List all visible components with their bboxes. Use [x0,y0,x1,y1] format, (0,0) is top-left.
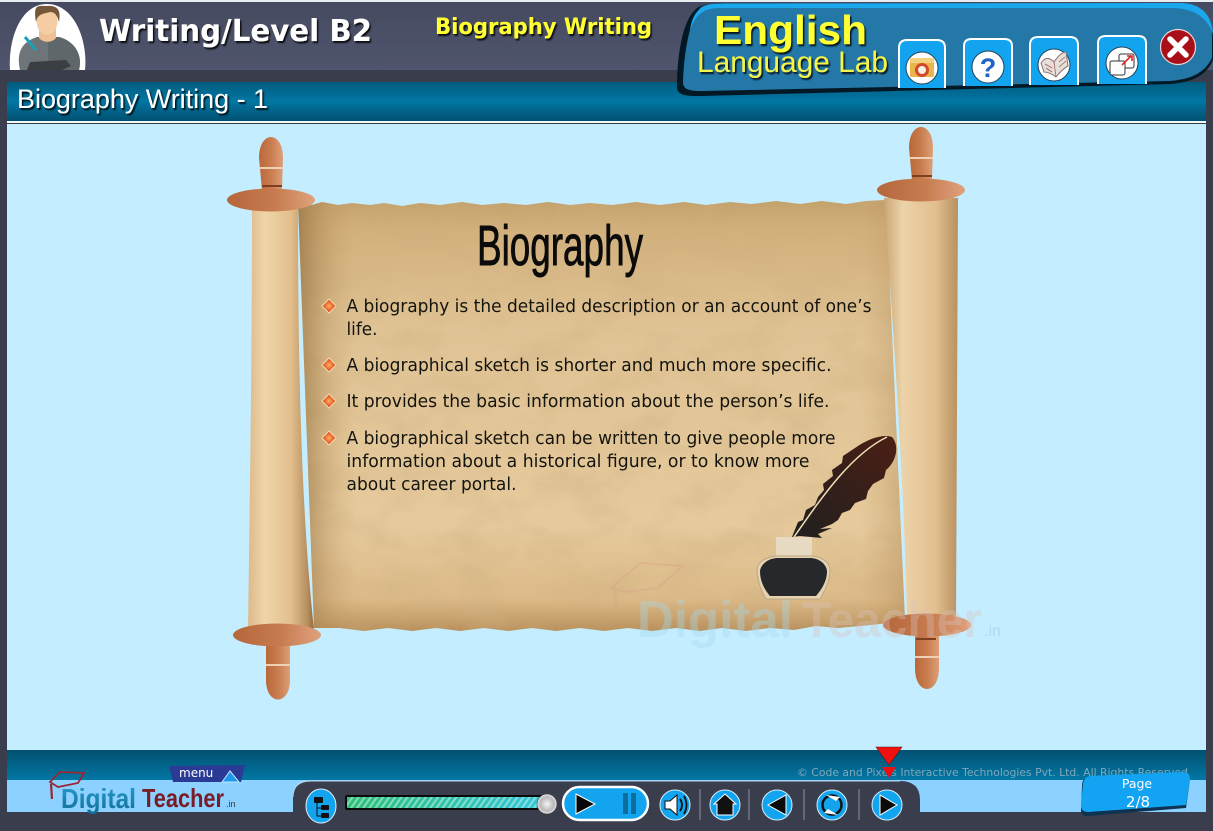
logo: Digital Teacher: .in [226,799,236,809]
control bar [293,781,920,823]
watermark: Digital Teacher: Teacher [802,592,982,648]
tab: help [964,39,1012,86]
red page marker [876,747,902,778]
heading: Biography: Biography [477,214,643,278]
button: previous [762,790,792,820]
tab: folder clock [899,40,945,88]
menu tab: menu [179,766,213,780]
section heading: Biography Writing - 1 [17,84,268,114]
top knob [227,137,315,212]
bullet 4 [322,429,836,495]
topic title: Biography Writing [435,15,652,40]
header title: Writing/Level B2 [99,14,372,49]
main content area [7,124,1206,750]
watermark: Digital Teacher [611,563,1001,649]
tab: book [1030,37,1078,85]
page indicator: 2/8 [1126,793,1150,811]
play pause pill [563,787,648,820]
bullet 1: A biography is the detailed description or an account of one’s [346,297,872,317]
bottom band [7,750,1206,812]
avatar: student writing [10,4,85,70]
icon: quill and inkwell [757,436,896,599]
subtitle band [7,82,1206,123]
panel: English Language Lab toolbar [677,3,1213,96]
icon: close button [1160,30,1196,64]
top knob [877,127,965,202]
bottom knob [883,614,971,689]
bullet list [322,297,872,495]
bullet 2: A biographical sketch is shorter and much more specific. [346,356,832,376]
left roller [227,137,321,700]
button: replay [817,790,847,820]
Language Lab heading: Language Lab [697,46,888,79]
bullet 4: information about a historical figure, or to know more [346,452,810,472]
logo: Digital Teacher: Teacher [142,783,224,813]
page indicator [1081,772,1190,816]
bullet 1 [322,297,872,340]
button: volume [660,790,690,820]
right roller [877,127,971,689]
bullet 4: A biographical sketch can be written to give people more [346,429,836,449]
watermark: Digital Teacher: .in [984,623,1001,640]
button: tree menu [306,789,336,823]
logo: Digital Teacher [50,772,236,814]
button: next [872,790,902,820]
watermark: Digital Teacher: Digital [637,591,793,649]
menu tab [169,765,245,782]
parchment sheet [290,198,915,634]
tab: window resize [1098,36,1146,84]
English heading: English [714,7,867,53]
bullet 1: life. [346,320,378,340]
bottom knob [233,624,321,700]
progress bar [345,794,557,814]
tab: help: ? [980,53,996,83]
logo: Digital Teacher: Digital [61,783,136,814]
copyright: © Code and Pixels Interactive Technologies Pvt. Ltd. All Rights Reserved [797,766,1188,779]
bullet 4: about career portal. [346,475,516,495]
scroll illustration [227,127,971,700]
bullet 3: It provides the basic information about the person’s life. [346,392,830,412]
page indicator: Page [1122,776,1152,791]
button: home [710,790,740,820]
